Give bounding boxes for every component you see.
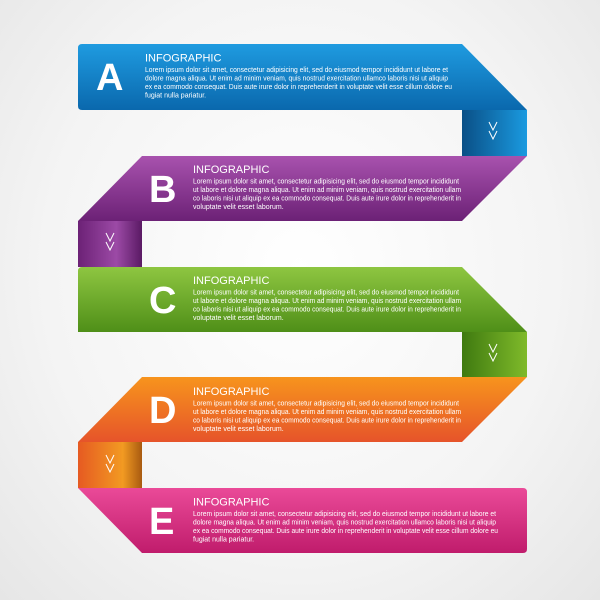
- panel: D: co laboris nisi ut aliquip ex ea commodo consequat. Duis aute irure dolor in reprehenderit in: [193, 418, 461, 424]
- panel: B: voluptate velit esset laborum.: [193, 204, 284, 211]
- panel: B: INFOGRAPHIC: [193, 164, 269, 176]
- panel: C: voluptate velit esset laborum.: [193, 315, 284, 322]
- panel: C: [78, 267, 527, 332]
- panel: A: ex ea commodo consequat. Duis aute irure dolor in reprehenderit in voluptate velit esse cillum dolore eu: [145, 84, 452, 91]
- panel: C: INFOGRAPHIC: [193, 275, 269, 287]
- panel: A: [78, 44, 527, 110]
- panel: C: co laboris nisi ut aliquip ex ea commodo consequat. Duis aute irure dolor in reprehenderit in: [193, 306, 461, 314]
- panel: E: dolore magna aliqua. Ut enim ad minim veniam, quis nostrud exercitation ullamco laboris nisi ut aliquip: [193, 520, 496, 526]
- panel: B: Lorem ipsum dolor sit amet, consectetur adipisicing elit, sed do eiusmod tempor incididunt: [193, 178, 459, 186]
- panel: E: E: [149, 501, 174, 543]
- icon: chevrons A: [489, 122, 497, 139]
- panel: D: INFOGRAPHIC: [193, 386, 269, 398]
- panel: C: C: [149, 280, 176, 322]
- panel: B: [78, 156, 527, 221]
- panel: E: ex ea commodo consequat. Duis aute irure dolor in reprehenderit in voluptate velit esse cillum dolore eu: [193, 528, 498, 535]
- panel: D: D: [149, 390, 176, 432]
- panel: A: A: [96, 57, 123, 99]
- panel: D: [78, 377, 527, 442]
- icon: chevrons C: [489, 344, 497, 361]
- panel: D: voluptate velit esset laborum.: [193, 426, 284, 433]
- panel: E: INFOGRAPHIC: [193, 496, 269, 508]
- connector: C to D: [462, 332, 527, 377]
- icon: chevrons B: [106, 233, 114, 250]
- panel: E: Lorem ipsum dolor sit amet, consectetur adipisicing elit, sed do eiusmod tempor incididunt ut labore et: [193, 511, 496, 518]
- connector: A to B: [462, 110, 527, 156]
- panel: A: dolore magna aliqua. Ut enim ad minim veniam, quis nostrud exercitation ullamco laboris nisi ut aliquip: [145, 76, 448, 82]
- panel: B: ut labore et dolore magna aliqua. Ut enim ad minim veniam, quis nostrud exercitation ullam: [193, 187, 461, 194]
- connector: D to E: [78, 442, 142, 488]
- panel: D: Lorem ipsum dolor sit amet, consectetur adipisicing elit, sed do eiusmod tempor incididunt: [193, 400, 459, 408]
- panel: E: [78, 488, 527, 553]
- panel: C: ut labore et dolore magna aliqua. Ut enim ad minim veniam, quis nostrud exercitation ullam: [193, 298, 461, 305]
- panel: A: Lorem ipsum dolor sit amet, consectetur adipisicing elit, sed do eiusmod tempor incididunt ut labore et: [145, 67, 448, 74]
- panel: C: Lorem ipsum dolor sit amet, consectetur adipisicing elit, sed do eiusmod tempor incididunt: [193, 290, 459, 296]
- panel: A: INFOGRAPHIC: [145, 52, 221, 64]
- panel: B: co laboris nisi ut aliquip ex ea commodo consequat. Duis aute irure dolor in reprehenderit in: [193, 196, 461, 202]
- panel: A: fugiat nulla pariatur.: [145, 92, 206, 100]
- panel: D: ut labore et dolore magna aliqua. Ut enim ad minim veniam, quis nostrud exercitation ullam: [193, 409, 461, 416]
- icon: chevrons D: [106, 455, 114, 472]
- connector: B to C: [78, 221, 142, 267]
- panel: B: B: [149, 169, 176, 211]
- panel: E: fugiat nulla pariatur.: [193, 536, 254, 544]
